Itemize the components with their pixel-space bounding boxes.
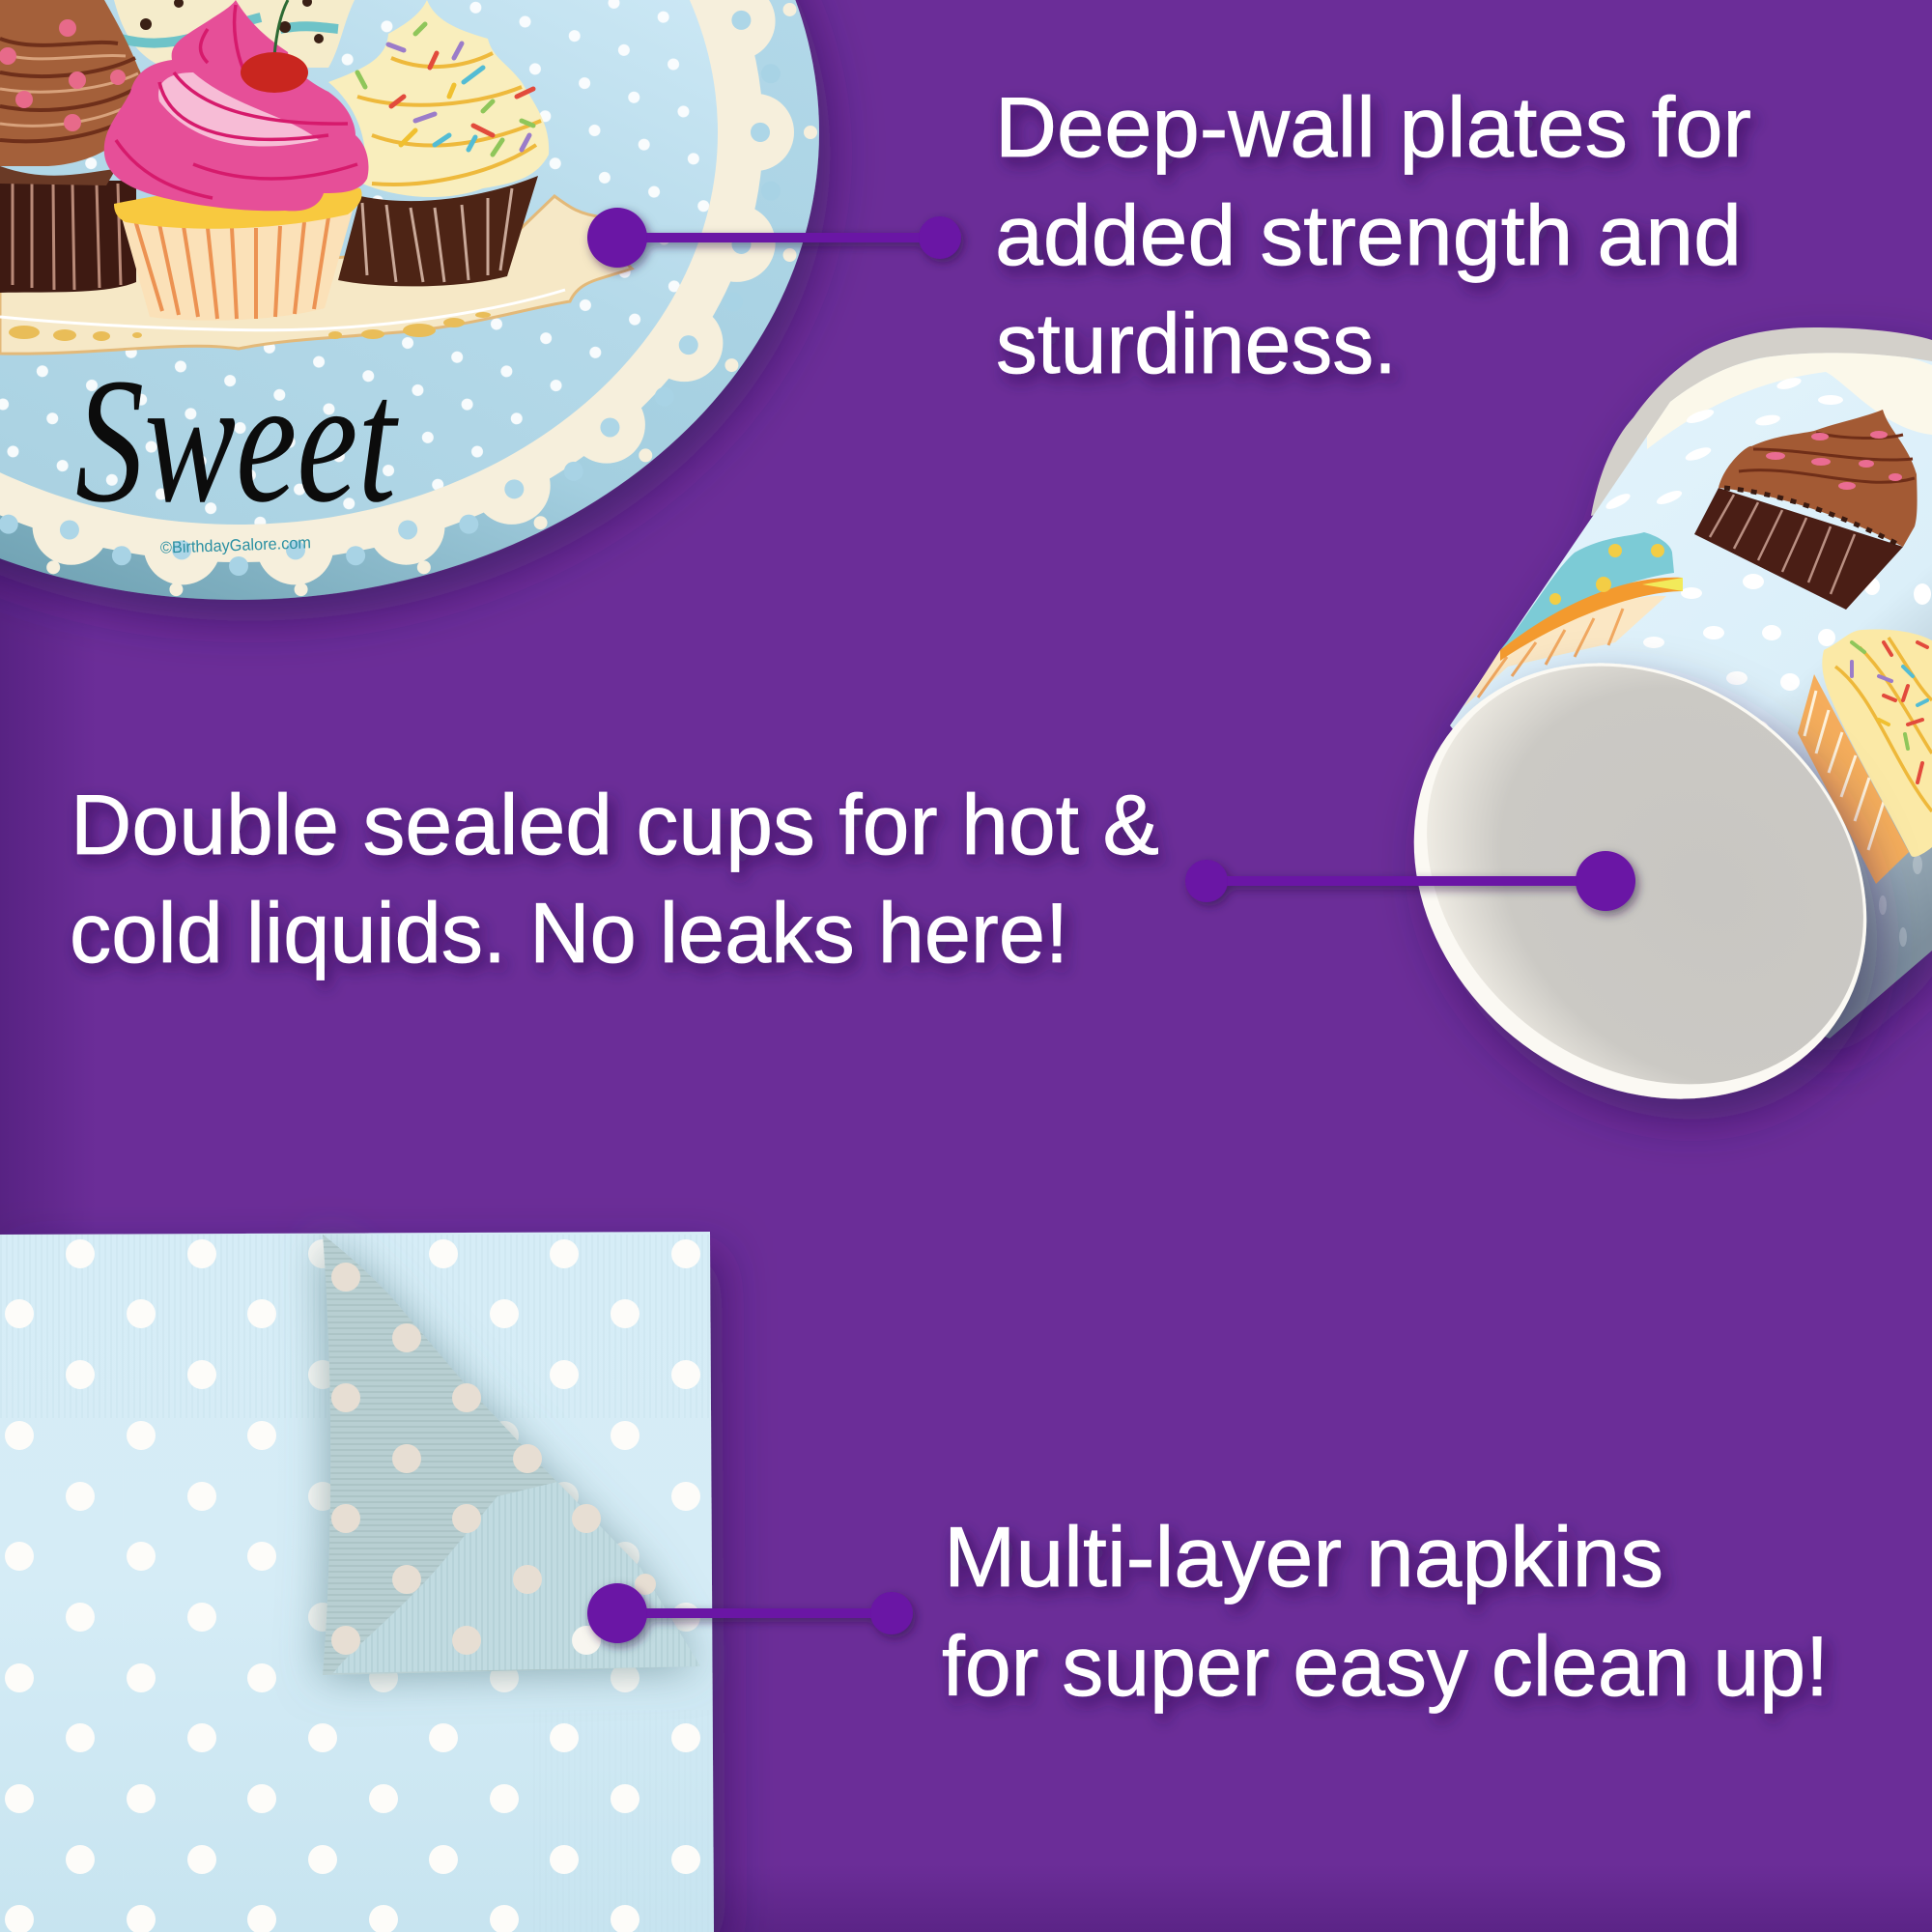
text: napkins: Multi-layer napkins [944,1509,1663,1605]
text: plates [995,79,1751,391]
text: napkins: for super easy clean up! [942,1618,1829,1714]
text: plates: sturdiness. [996,296,1397,391]
cup inner base [1343,580,1932,1171]
cupcake: sprinkles chip back [114,0,355,68]
cupcake: vanilla sprinkles [328,0,549,286]
cupcake: chocolate [0,0,143,293]
cup cupcake: blue frosting [1463,532,1683,707]
napkin sheet [0,1232,714,1932]
plate well [0,0,718,525]
callout line: plate [587,208,961,268]
cup cupcake: vanilla sprinkles [1798,630,1932,884]
callout line: napkin [587,1583,913,1643]
panel: plate [0,0,819,600]
text: cups: cold liquids. No leaks here! [70,885,1068,980]
napkin polka dots [5,1239,700,1932]
panel: cup [1405,327,1932,1142]
cup cupcake: chocolate [1694,410,1918,610]
copyright mark: ©BirthdayGalore.com [160,533,311,557]
text: cups [70,777,1159,980]
text: plates: Deep-wall plates for [995,79,1751,175]
script word Sweet: Sweet [75,342,400,540]
plate lace rim [0,0,810,592]
cup opening [1326,573,1932,1189]
napkin ribbing [0,1235,710,1932]
cupcake: pink frosting with cherry [104,0,369,321]
folded corner dots [331,1263,656,1655]
cup body [1450,327,1932,1038]
napkin folded corner [323,1235,700,1675]
plate body [0,0,819,600]
text: napkins [942,1509,1829,1714]
cake stand [0,196,632,354]
text: cups: Double sealed cups for hot & [71,777,1159,872]
text: plates: added strength and [995,187,1742,283]
panel: napkin [0,1232,714,1932]
cup print [1604,350,1932,947]
callout line: cup [1185,851,1635,911]
